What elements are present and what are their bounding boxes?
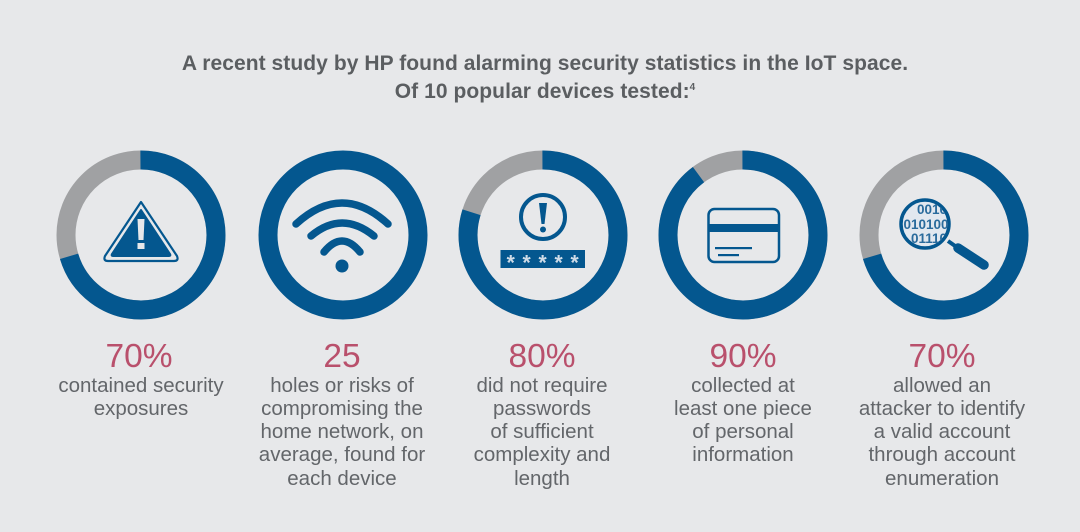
stat: 70% contained security exposures: 70% [105, 338, 173, 375]
donut: 70% [66, 160, 216, 310]
icon: magnifier with binary: 01110 [911, 231, 947, 246]
stat: 70% contained security exposures [58, 338, 224, 420]
stat: 25 holes or risks [259, 338, 425, 490]
stat: 25 holes or risks: compromising the [261, 397, 423, 420]
stat: 90% personal information: 90% [709, 338, 777, 375]
stat: 70% account enumeration: attacker to identify [859, 397, 1025, 420]
stat: 70% account enumeration: through account [868, 443, 1016, 466]
donut: 90% [668, 160, 818, 310]
stat: 90% personal information: collected at [691, 374, 795, 396]
icon: magnifier with binary: 010100 [903, 217, 949, 232]
stat: 70% account enumeration: allowed an [893, 374, 991, 396]
stat: 80% passwords [474, 338, 610, 490]
stat: 90% personal information: least one piece [674, 397, 812, 420]
stat: 80% passwords: length [514, 466, 570, 490]
icon: wifi [296, 203, 388, 272]
stat: 90% personal information: of personal [692, 420, 794, 443]
stat: 80% passwords: passwords [493, 397, 591, 420]
stat: 80% passwords: did not require [476, 374, 608, 396]
icon: magnifier with binary [901, 200, 984, 265]
icon: credit card [708, 209, 780, 262]
stat: 25 holes or risks: average, found for [259, 443, 425, 466]
stat: 70% account enumeration: 70% [908, 338, 976, 375]
donut: full ring [268, 160, 418, 310]
stat: 70% account enumeration: enumeration [885, 466, 999, 490]
stat: 25 holes or risks: 25 [323, 338, 361, 375]
stat: 80% passwords: 80% [508, 338, 576, 375]
donut: 80% [468, 160, 618, 310]
stat: 80% passwords: of sufficient [490, 420, 594, 443]
icon: password alert: ***** [507, 252, 586, 274]
icon: warning triangle [104, 202, 178, 261]
title [182, 52, 908, 102]
stat: 80% passwords: complexity and [474, 443, 610, 466]
stat: 70% contained security exposures: exposures [94, 397, 188, 420]
stat: 70% account enumeration: a valid account [874, 420, 1010, 443]
donut: 70% [869, 160, 1019, 310]
icon: magnifier with binary: 0010 [917, 202, 947, 217]
stat: 90% personal information [674, 338, 812, 466]
stat: 25 holes or risks: home network, on [261, 420, 423, 443]
stat: 70% contained security exposures: contained security [58, 374, 224, 396]
stat: 70% account enumeration [859, 338, 1025, 490]
title: A recent study by HP found alarming security statistics in the IoT space. [182, 52, 908, 75]
icon: password alert [500, 195, 586, 274]
title: Of 10 popular devices tested:4 [395, 80, 695, 102]
stat: 25 holes or risks: holes or risks of [270, 374, 414, 396]
stat: 25 holes or risks: each device [287, 466, 397, 490]
donut charts and icons [56, 150, 1028, 320]
stat: 90% personal information: information [692, 443, 794, 466]
